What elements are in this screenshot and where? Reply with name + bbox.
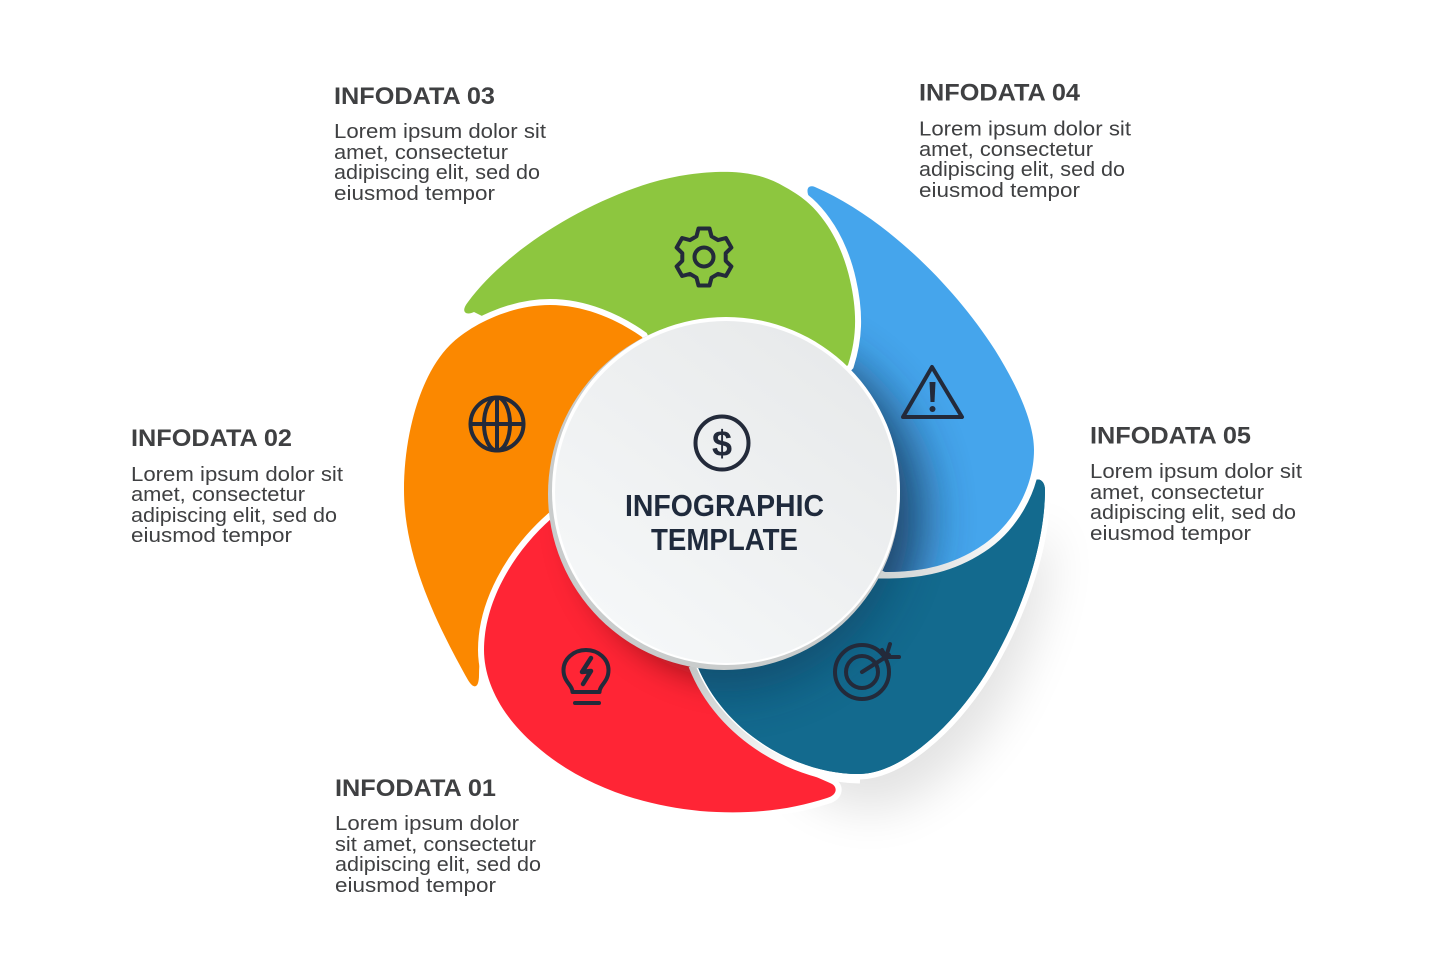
center title: [625, 488, 824, 557]
text: infodata 02: eiusmod tempor: [131, 525, 292, 547]
text: infodata 05: [1090, 422, 1302, 545]
text: infodata 02: INFODATA 02: [131, 425, 292, 452]
segment: blue: [808, 186, 1037, 578]
icon: bulb: [564, 650, 608, 703]
icon: target: [835, 644, 899, 699]
center title: INFOGRAPHIC: [625, 488, 824, 523]
text: infodata 03: adipiscing elit, sed do: [334, 162, 540, 184]
text: infodata 01: adipiscing elit, sed do: [335, 854, 541, 876]
text: infodata 04: Lorem ipsum dolor sit: [919, 118, 1131, 140]
text: infodata 05: Lorem ipsum dolor sit: [1090, 461, 1302, 483]
text: infodata 01: Lorem ipsum dolor: [335, 813, 519, 835]
outer soft shadow: [794, 526, 1049, 810]
text: infodata 05: adipiscing elit, sed do: [1090, 502, 1296, 524]
text: infodata 01: sit amet, consectetur: [335, 834, 536, 856]
icon: dollar: [696, 416, 748, 470]
text: infodata 03: INFODATA 03: [334, 83, 495, 110]
center circle: [548, 317, 900, 670]
text: infodata 04: [919, 80, 1131, 202]
segment: green: [464, 172, 855, 490]
text: infodata 01: eiusmod tempor: [335, 875, 496, 897]
text: infodata 04: eiusmod tempor: [919, 180, 1080, 202]
icon: warning: [903, 367, 962, 417]
center title: TEMPLATE: [651, 522, 798, 557]
icon: dollar: $: [712, 423, 732, 464]
text: infodata 03: eiusmod tempor: [334, 183, 495, 205]
icon: globe: [470, 398, 524, 450]
text: infodata 01: [335, 775, 541, 897]
text: infodata 03: amet, consectetur: [334, 142, 508, 164]
text: infodata 05: eiusmod tempor: [1090, 523, 1251, 545]
text: infodata 04: INFODATA 04: [919, 80, 1081, 106]
text: infodata 05: amet, consectetur: [1090, 482, 1264, 504]
text: infodata 02: adipiscing elit, sed do: [131, 505, 337, 527]
text: infodata 02: amet, consectetur: [131, 484, 305, 506]
segment: orange overlap: [412, 299, 648, 420]
text: infodata 03: Lorem ipsum dolor sit: [334, 121, 546, 143]
text: infodata 03: [334, 83, 546, 205]
text: infodata 05: INFODATA 05: [1090, 422, 1251, 450]
text: infodata 04: amet, consectetur: [919, 139, 1093, 161]
text: infodata 02: Lorem ipsum dolor sit: [131, 464, 343, 486]
text: infodata 02: [131, 425, 343, 547]
text: infodata 04: adipiscing elit, sed do: [919, 159, 1125, 181]
icon: gear: [677, 228, 731, 286]
segment: red: [478, 512, 842, 812]
text: infodata 01: INFODATA 01: [335, 775, 496, 802]
segment: teal: [688, 480, 1045, 784]
segment: orange: [404, 305, 725, 686]
